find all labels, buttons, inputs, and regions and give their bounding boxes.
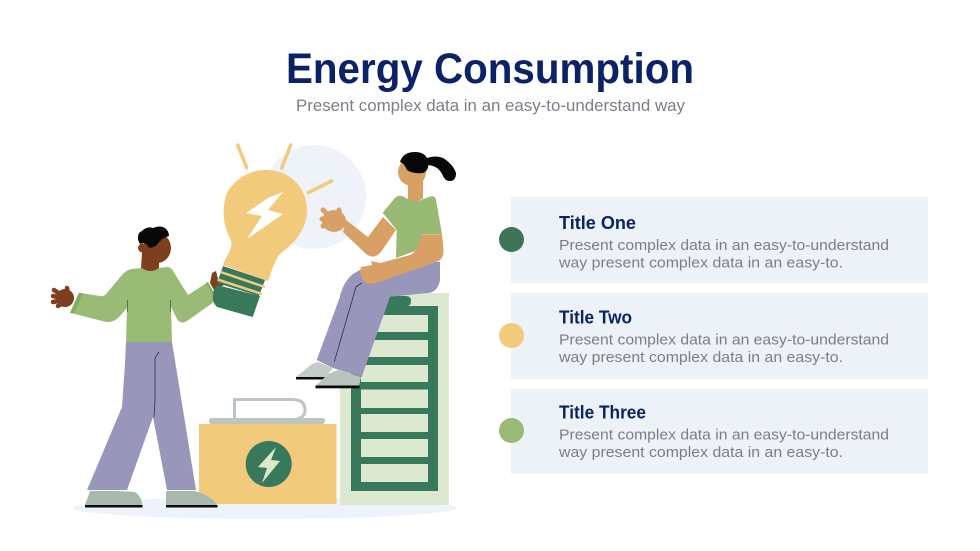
marker: green dot (499, 227, 524, 252)
text block: Present complex data in an easy-to-understand (559, 426, 889, 444)
heading: title three: Title Three (559, 402, 646, 422)
neck and head (408, 180, 423, 201)
resting arm and hand (360, 234, 444, 284)
rays (238, 145, 332, 193)
subtitle: Present complex data in an easy-to-understand way (296, 97, 686, 115)
neck and head (141, 252, 159, 272)
hands (53, 288, 74, 307)
icon: car battery (199, 400, 336, 504)
text block (558, 426, 889, 461)
background circle (262, 145, 366, 249)
illustration: energy scene (53, 145, 456, 519)
heading: title two: Title Two (559, 306, 632, 328)
ponytail (427, 156, 456, 181)
panel: title two (499, 293, 928, 379)
t-shirt (383, 196, 442, 258)
icon: tall battery (340, 293, 449, 505)
figure: woman (296, 152, 456, 388)
panel: title one (499, 197, 928, 283)
ground shadow (74, 497, 456, 519)
text block: way present complex data in an easy-to. (558, 349, 843, 366)
bulb base (217, 266, 265, 296)
raised arm and hand (322, 210, 396, 257)
text block: way present complex data in an easy-to. (558, 254, 843, 272)
text block: way present complex data in an easy-to. (558, 444, 843, 461)
heading: title one: Title One (559, 212, 636, 233)
text block: Present complex data in an easy-to-understand (559, 332, 889, 348)
trousers (87, 342, 196, 490)
panel: title three (499, 389, 928, 474)
marker: yellow dot (499, 323, 524, 348)
figure: man (53, 226, 224, 508)
text block (558, 332, 889, 366)
marker: light green dot (499, 418, 524, 443)
trousers (317, 262, 440, 377)
title: Energy Consumption (286, 45, 694, 93)
sweater (70, 267, 214, 342)
text block: Present complex data in an easy-to-understand (559, 237, 889, 254)
icon: light bulb (213, 145, 332, 317)
shoes (85, 491, 142, 505)
shoes (296, 362, 333, 377)
text block (558, 237, 889, 272)
